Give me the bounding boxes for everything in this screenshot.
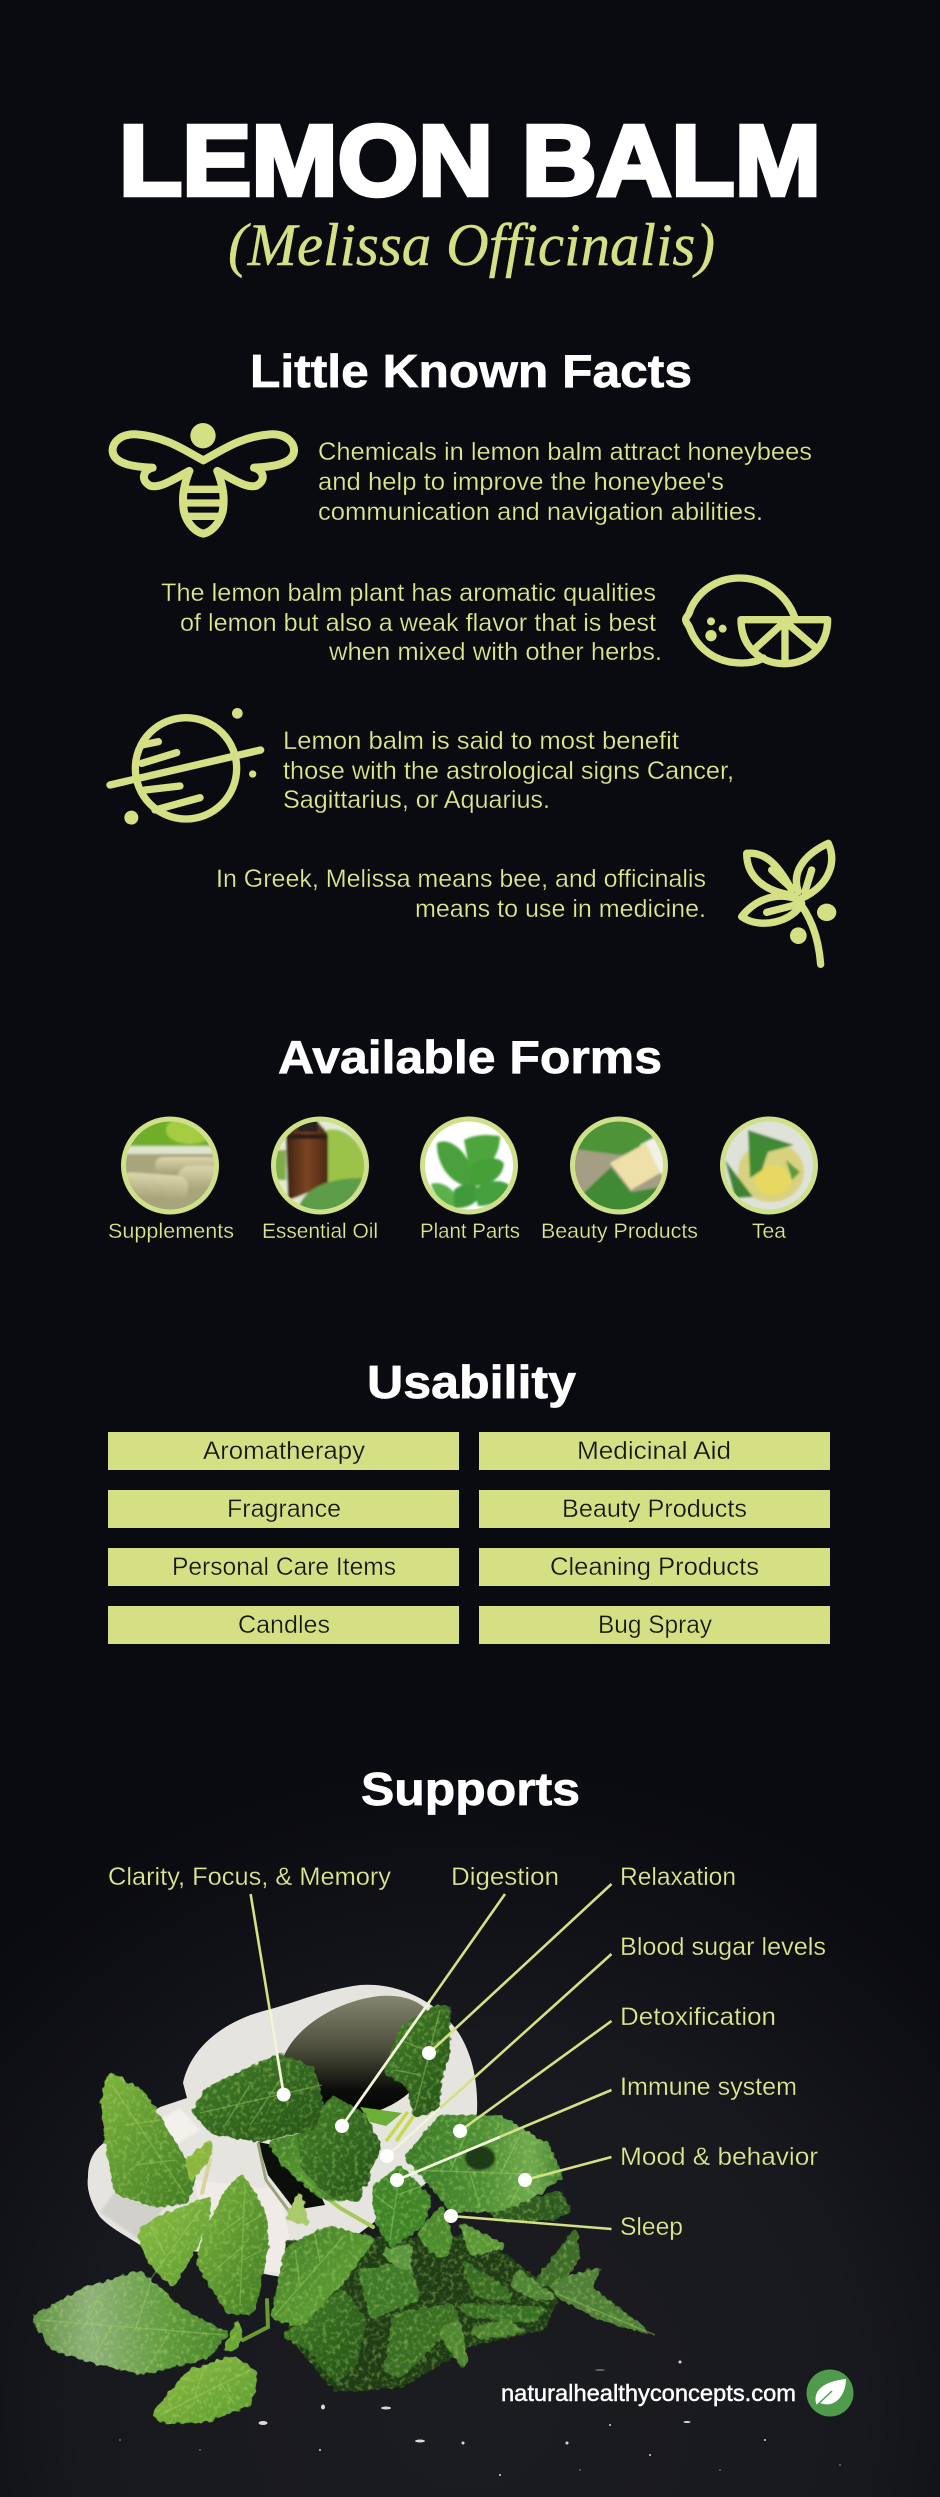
form: supplements [108, 1110, 234, 1243]
photo: spilled cup with lemon balm leaves [30, 1985, 657, 2424]
form: plant parts: Plant Parts [420, 1220, 520, 1243]
callout: detoxification [453, 2003, 776, 2138]
callout: immune system [390, 2073, 797, 2187]
usability grid: Fragrance [227, 1495, 341, 1523]
heading: usability: Usability [367, 1356, 576, 1408]
callout: clarity, focus and memory [108, 1863, 392, 2102]
fact: honeybees [318, 438, 812, 526]
fact: greek meaning: means to use in medicine. [415, 895, 706, 923]
usability grid: Beauty Products [562, 1495, 747, 1523]
icon: leaf sprig [742, 843, 836, 964]
callout: clarity, focus and memory: Clarity, Focus, & Memory [108, 1863, 392, 1891]
stems [202, 2113, 470, 2340]
form: essential oil [264, 1116, 377, 1238]
fact: astrological signs: Lemon balm is said to most benefit [283, 727, 679, 755]
fact: greek meaning: In Greek, Melissa means bee, and officinalis [216, 865, 706, 893]
callout: mood and behavior: Mood & behavior [620, 2143, 818, 2171]
fact: astrological signs [283, 727, 734, 814]
fact: aromatic qualities: The lemon balm plant has aromatic qualities [161, 579, 656, 607]
form: tea [720, 1116, 818, 1238]
heading: available forms: Available Forms [278, 1031, 662, 1083]
subtitle: (Melissa Officinalis) [228, 212, 715, 278]
mint leaves [30, 2005, 657, 2424]
form: tea: Tea [752, 1220, 786, 1243]
usability grid: Candles [238, 1611, 330, 1639]
fact: aromatic qualities: when mixed with other herbs. [328, 638, 662, 666]
usability grid: Aromatherapy [203, 1437, 366, 1465]
form: plant parts [420, 1116, 520, 1238]
fact: astrological signs: Sagittarius, or Aquarius. [283, 786, 550, 814]
icon: lemon [686, 578, 828, 664]
dark leaf hollow [465, 2146, 495, 2170]
usability grid: Cleaning Products [550, 1553, 759, 1581]
form: supplements: Supplements [108, 1220, 234, 1243]
fact: aromatic qualities: of lemon but also a weak flavor that is best [180, 609, 656, 637]
form: beauty products: Beauty Products [541, 1220, 698, 1243]
icon: bee [113, 423, 294, 534]
callout: detoxification: Detoxification [620, 2003, 776, 2031]
fact: greek meaning [216, 865, 706, 923]
callout: sleep [444, 2209, 683, 2241]
callout: relaxation [422, 1863, 736, 2060]
callout: immune system: Immune system [620, 2073, 797, 2101]
fact: aromatic qualities [161, 579, 662, 666]
water droplets [119, 2360, 841, 2476]
fact: honeybees: Chemicals in lemon balm attract honeybees [318, 438, 812, 466]
heading: little known facts: Little Known Facts [250, 345, 692, 397]
logo: green leaf badge [806, 2370, 854, 2416]
icon: planet [110, 708, 261, 825]
website url: naturalhealthyconcepts.com [501, 2380, 796, 2406]
fact: honeybees: communication and navigation abilities. [318, 498, 763, 526]
leaf veins [40, 2010, 655, 2415]
heading: supports: Supports [361, 1763, 580, 1815]
title: LEMON BALM [119, 105, 821, 217]
usability grid: Personal Care Items [172, 1553, 396, 1581]
fact: honeybees: and help to improve the honeybee's [318, 468, 724, 496]
cup and saucer [88, 1985, 477, 2278]
form: beauty products [541, 1110, 698, 1243]
usability grid: Medicinal Aid [577, 1437, 731, 1465]
usability grid: Bug Spray [598, 1611, 712, 1639]
callout: relaxation: Relaxation [620, 1863, 736, 1891]
fact: astrological signs: those with the astrological signs Cancer, [283, 757, 734, 785]
callout: blood sugar levels: Blood sugar levels [620, 1933, 826, 1961]
callout: digestion: Digestion [451, 1863, 559, 1891]
callout: mood and behavior [518, 2143, 818, 2187]
form: essential oil: Essential Oil [262, 1220, 378, 1243]
callout: blood sugar levels [380, 1933, 826, 2163]
callout: sleep: Sleep [620, 2213, 683, 2241]
usability grid [108, 1432, 830, 1644]
callout: digestion [335, 1863, 559, 2133]
